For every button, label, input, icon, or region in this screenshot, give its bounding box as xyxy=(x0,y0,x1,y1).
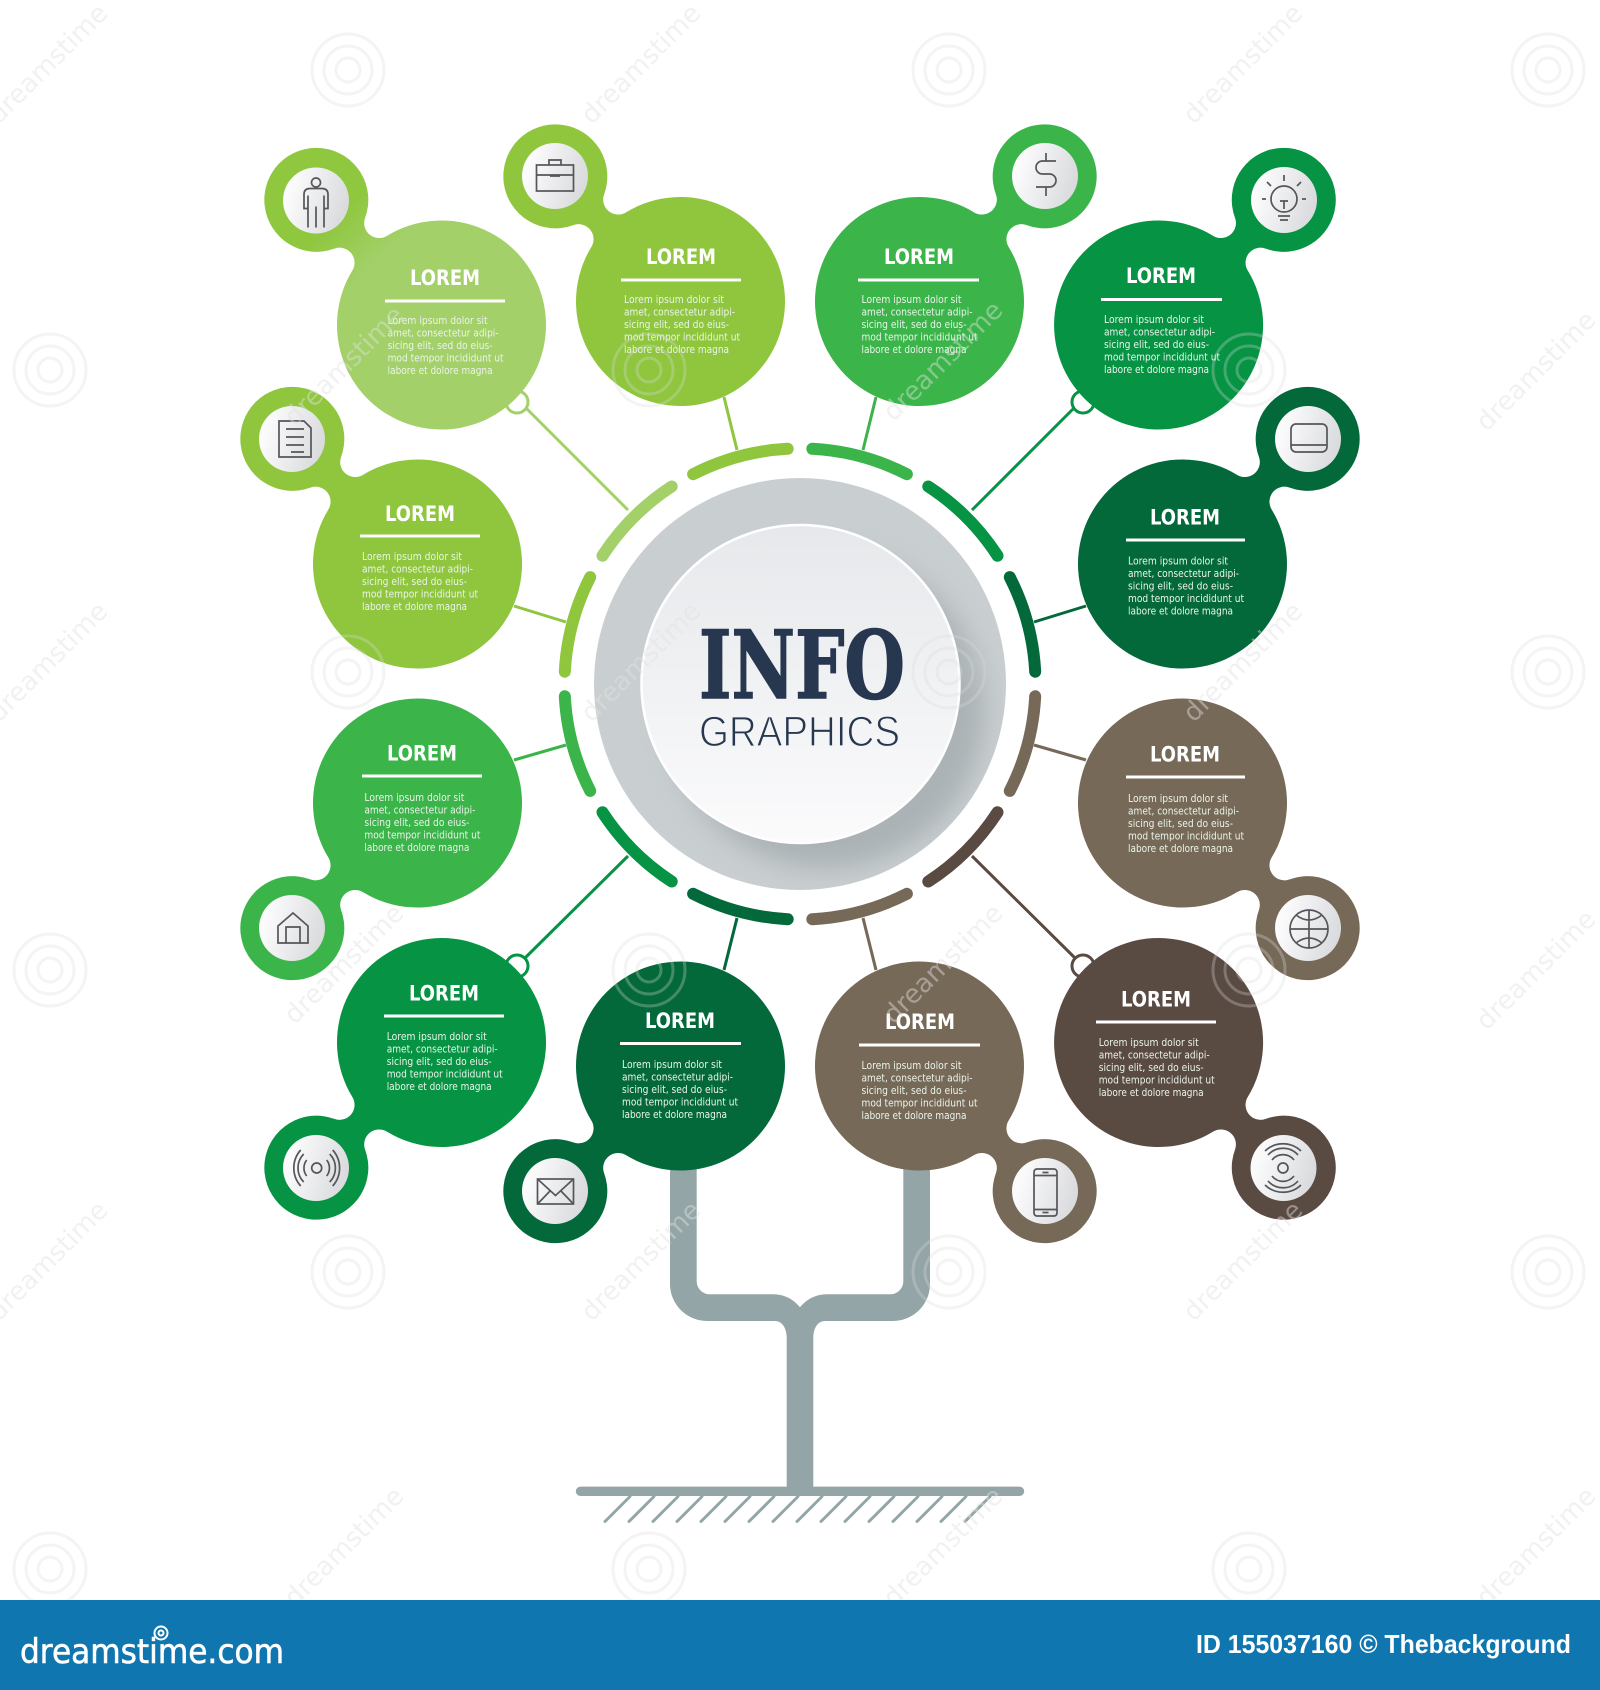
body text xyxy=(1128,556,1244,618)
watermark text: dreamstime xyxy=(1471,306,1600,437)
body text: amet, consectetur adipi- xyxy=(362,564,473,576)
watermark text: dreamstime xyxy=(878,1482,1009,1613)
heading: LOREM xyxy=(1150,743,1220,767)
watermark text: dreamstime xyxy=(279,1482,410,1613)
body text: Lorem ipsum dolor sit xyxy=(1099,1037,1199,1049)
body text: amet, consectetur adipi- xyxy=(387,1044,498,1056)
body text: Lorem ipsum dolor sit xyxy=(862,1060,962,1072)
body text: labore et dolore magna xyxy=(364,842,469,854)
body text: mod tempor incididunt ut xyxy=(387,1068,503,1080)
body text: sicing elit, sed do eius- xyxy=(362,576,467,588)
body text: mod tempor incididunt ut xyxy=(624,332,740,344)
body text: sicing elit, sed do eius- xyxy=(862,1085,967,1097)
body text: mod tempor incididunt ut xyxy=(364,830,480,842)
body text xyxy=(624,294,740,356)
body text: sicing elit, sed do eius- xyxy=(388,340,493,352)
icon: signal xyxy=(294,1150,340,1186)
node 3: dollar xyxy=(772,66,1155,449)
body text: sicing elit, sed do eius- xyxy=(1128,581,1233,593)
logo text: dreamstime.com xyxy=(20,1632,284,1672)
body text: amet, consectetur adipi- xyxy=(862,306,973,318)
icon: briefcase xyxy=(536,160,574,191)
watermark text: dreamstime xyxy=(279,899,410,1030)
body text xyxy=(1128,793,1244,855)
icon: mail xyxy=(538,1179,574,1204)
body text: mod tempor incididunt ut xyxy=(388,352,504,364)
node 11: phone xyxy=(772,918,1155,1302)
body text: amet, consectetur adipi- xyxy=(1104,326,1215,338)
watermark text: dreamstime xyxy=(1178,0,1309,130)
body text xyxy=(362,551,478,613)
body text: Lorem ipsum dolor sit xyxy=(387,1031,487,1043)
node 12: wireless xyxy=(1011,895,1394,1278)
body text: sicing elit, sed do eius- xyxy=(1099,1062,1204,1074)
watermark text: dreamstime xyxy=(1471,1482,1600,1613)
body text: Lorem ipsum dolor sit xyxy=(364,792,464,804)
node 8: basketball xyxy=(1035,655,1418,1039)
footer banner xyxy=(0,1600,1600,1690)
node 5: document xyxy=(182,328,565,712)
body text: sicing elit, sed do eius- xyxy=(1128,818,1233,830)
watermark text: dreamstime xyxy=(576,1196,707,1327)
center hub xyxy=(594,478,1006,890)
node 2: briefcase xyxy=(445,66,828,449)
body text xyxy=(387,1031,503,1093)
icon: phone xyxy=(1034,1169,1057,1216)
body text xyxy=(364,792,480,854)
tree trunk xyxy=(670,1160,930,1490)
body text xyxy=(1099,1037,1215,1099)
watermark text: dreamstime xyxy=(1471,905,1600,1036)
body text: sicing elit, sed do eius- xyxy=(624,319,729,331)
watermark text: dreamstime xyxy=(576,597,707,728)
heading: LOREM xyxy=(885,1010,955,1034)
node 1: person xyxy=(206,89,589,473)
body text: mod tempor incididunt ut xyxy=(1128,593,1244,605)
body text: labore et dolore magna xyxy=(862,1110,966,1122)
heading: LOREM xyxy=(645,1009,715,1033)
body text: labore et dolore magna xyxy=(1128,606,1233,618)
body text: mod tempor incididunt ut xyxy=(622,1096,738,1108)
body text: sicing elit, sed do eius- xyxy=(862,319,967,331)
body text xyxy=(862,294,978,356)
watermark text: dreamstime xyxy=(279,301,410,432)
body text: Lorem ipsum dolor sit xyxy=(624,294,724,306)
connector lines xyxy=(506,391,1094,977)
body text: amet, consectetur adipi- xyxy=(622,1072,733,1084)
icon: basketball xyxy=(1290,910,1328,948)
body text: amet, consectetur adipi- xyxy=(624,306,735,318)
body text: amet, consectetur adipi- xyxy=(1128,568,1239,580)
heading: LOREM xyxy=(409,982,479,1006)
watermark text: dreamstime xyxy=(878,899,1009,1030)
body text: amet, consectetur adipi- xyxy=(1099,1050,1210,1062)
dashed ring xyxy=(565,449,1035,919)
heading: LOREM xyxy=(1150,506,1220,530)
image credit: ID 155037160 © Thebackground xyxy=(1196,1629,1571,1659)
body text: Lorem ipsum dolor sit xyxy=(388,315,488,327)
body text: labore et dolore magna xyxy=(624,344,729,356)
body text: sicing elit, sed do eius- xyxy=(622,1084,727,1096)
body text: mod tempor incididunt ut xyxy=(1099,1074,1215,1086)
body text: Lorem ipsum dolor sit xyxy=(1128,793,1228,805)
icon: dollar xyxy=(1036,153,1056,196)
body text: labore et dolore magna xyxy=(388,365,493,377)
heading: LOREM xyxy=(646,245,716,269)
title: INFO: INFO xyxy=(699,611,905,721)
body text xyxy=(622,1059,738,1121)
heading: LOREM xyxy=(1121,988,1191,1012)
body text: labore et dolore magna xyxy=(1128,843,1233,855)
watermark text: dreamstime xyxy=(878,296,1009,427)
body text: labore et dolore magna xyxy=(362,601,467,613)
body text xyxy=(862,1060,978,1122)
body text: Lorem ipsum dolor sit xyxy=(862,294,962,306)
heading: LOREM xyxy=(387,742,457,766)
body text: sicing elit, sed do eius- xyxy=(387,1056,492,1068)
node 4: light bulb xyxy=(1011,89,1394,473)
icon: card xyxy=(1291,424,1327,452)
body text: Lorem ipsum dolor sit xyxy=(622,1059,722,1071)
body text: labore et dolore magna xyxy=(387,1081,492,1093)
icon: house xyxy=(278,913,308,943)
heading: LOREM xyxy=(1126,264,1196,288)
logo swirl xyxy=(154,1626,168,1640)
body text xyxy=(1104,314,1220,376)
body text: mod tempor incididunt ut xyxy=(862,1098,978,1110)
body text: amet, consectetur adipi- xyxy=(364,804,476,816)
body text: amet, consectetur adipi- xyxy=(388,328,499,340)
watermark text: dreamstime xyxy=(1178,1196,1309,1327)
watermark text: dreamstime xyxy=(576,0,707,130)
body text: sicing elit, sed do eius- xyxy=(364,817,470,829)
node 9: signal xyxy=(206,895,589,1278)
icon: person xyxy=(304,178,328,228)
body text: mod tempor incididunt ut xyxy=(1104,352,1220,364)
heading: LOREM xyxy=(884,245,954,269)
body text xyxy=(388,315,504,377)
body text: labore et dolore magna xyxy=(1099,1087,1204,1099)
icon: wireless xyxy=(1265,1144,1301,1192)
body text: Lorem ipsum dolor sit xyxy=(362,551,462,563)
node 6: card xyxy=(1035,328,1418,712)
body text: amet, consectetur adipi- xyxy=(862,1072,973,1084)
icon: light bulb xyxy=(1262,175,1306,220)
body text: sicing elit, sed do eius- xyxy=(1104,339,1209,351)
watermark text: dreamstime xyxy=(1178,597,1309,728)
body text: Lorem ipsum dolor sit xyxy=(1104,314,1204,326)
icon: document xyxy=(279,421,311,457)
body text: labore et dolore magna xyxy=(622,1109,727,1121)
ground xyxy=(580,1491,1020,1522)
body text: mod tempor incididunt ut xyxy=(1128,830,1244,842)
body text: mod tempor incididunt ut xyxy=(362,588,478,600)
node 7: house xyxy=(182,655,565,1039)
body text: Lorem ipsum dolor sit xyxy=(1128,556,1228,568)
body text: labore et dolore magna xyxy=(862,344,966,356)
body text: mod tempor incididunt ut xyxy=(862,332,978,344)
subtitle: GRAPHICS: GRAPHICS xyxy=(699,708,900,756)
body text: amet, consectetur adipi- xyxy=(1128,806,1239,818)
heading: LOREM xyxy=(410,266,480,290)
heading: LOREM xyxy=(385,502,455,526)
node 10: mail xyxy=(445,918,828,1302)
body text: labore et dolore magna xyxy=(1104,364,1209,376)
